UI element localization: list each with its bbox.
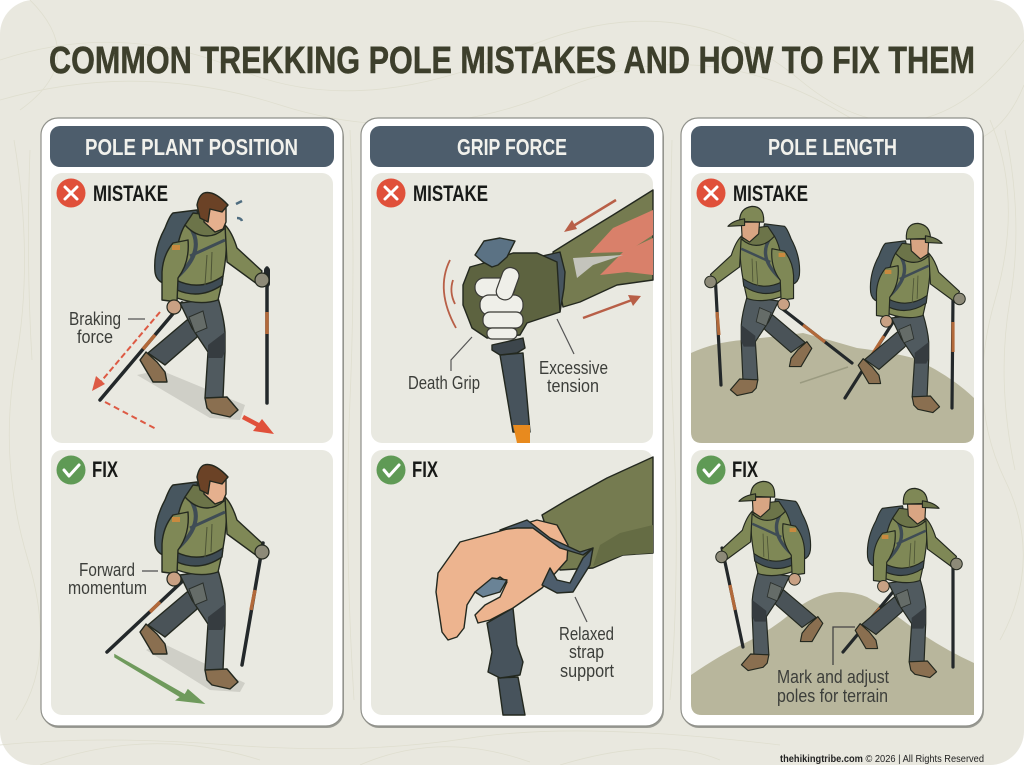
callout: relaxed strap support: Relaxed [559,624,614,644]
label: mistake [696,178,808,208]
label: fix: FIX [732,457,758,482]
callout: mark and adjust poles: Mark and adjust [777,667,889,687]
label: fix: FIX [92,457,118,482]
heading: pole length [691,126,974,167]
callout: mark and adjust poles [777,627,889,706]
callout: relaxed strap support [559,597,614,681]
label: mistake [56,178,168,208]
panel: pole plant position [41,118,344,728]
callout: death grip: Death Grip [408,373,480,393]
panel: grip force [361,118,664,728]
callout: braking force [69,309,145,347]
label: fix: FIX [412,457,438,482]
fix scene: relaxed hand on grip [371,450,653,715]
panel: pole length [681,118,984,728]
callout: relaxed strap support: support [560,661,614,681]
label: mistake: MISTAKE [733,181,808,206]
callout: excessive tension: Excessive [539,358,608,378]
label: fix [56,456,118,484]
heading: pole length: POLE LENGTH [768,134,897,160]
label: mistake [376,178,488,208]
mistake scene: pole planted behind [51,173,333,443]
mistake scene: hikers with wrong pole length on slope [691,173,974,443]
label: fix [696,456,758,484]
callout: excessive tension [539,319,608,396]
fix scene: pole angled backward with forward momentum [51,450,333,715]
callout: death grip [408,337,480,393]
callout: relaxed strap support: strap [569,642,604,662]
callout: forward momentum: momentum [68,578,147,598]
label: fix [376,456,438,484]
callout: braking force: Braking [69,309,121,329]
callout: mark and adjust poles: poles for terrain [777,686,888,706]
label: mistake: MISTAKE [413,181,488,206]
footer credit: thehikingtribe.com © 2026 | All Rights Reserved [780,753,984,765]
callout: forward momentum: Forward [79,560,135,580]
heading: pole plant position: POLE PLANT POSITION [85,134,298,160]
callout: forward momentum [68,560,158,598]
mistake scene: death grip [371,173,653,443]
label: mistake: MISTAKE [93,181,168,206]
callout: braking force: force [77,327,113,347]
heading: pole plant position [50,126,334,167]
callout: excessive tension: tension [547,376,599,396]
fix scene: hikers with adjusted poles on slope [691,450,974,715]
heading: grip force: GRIP FORCE [457,134,567,160]
heading: grip force [370,126,654,167]
